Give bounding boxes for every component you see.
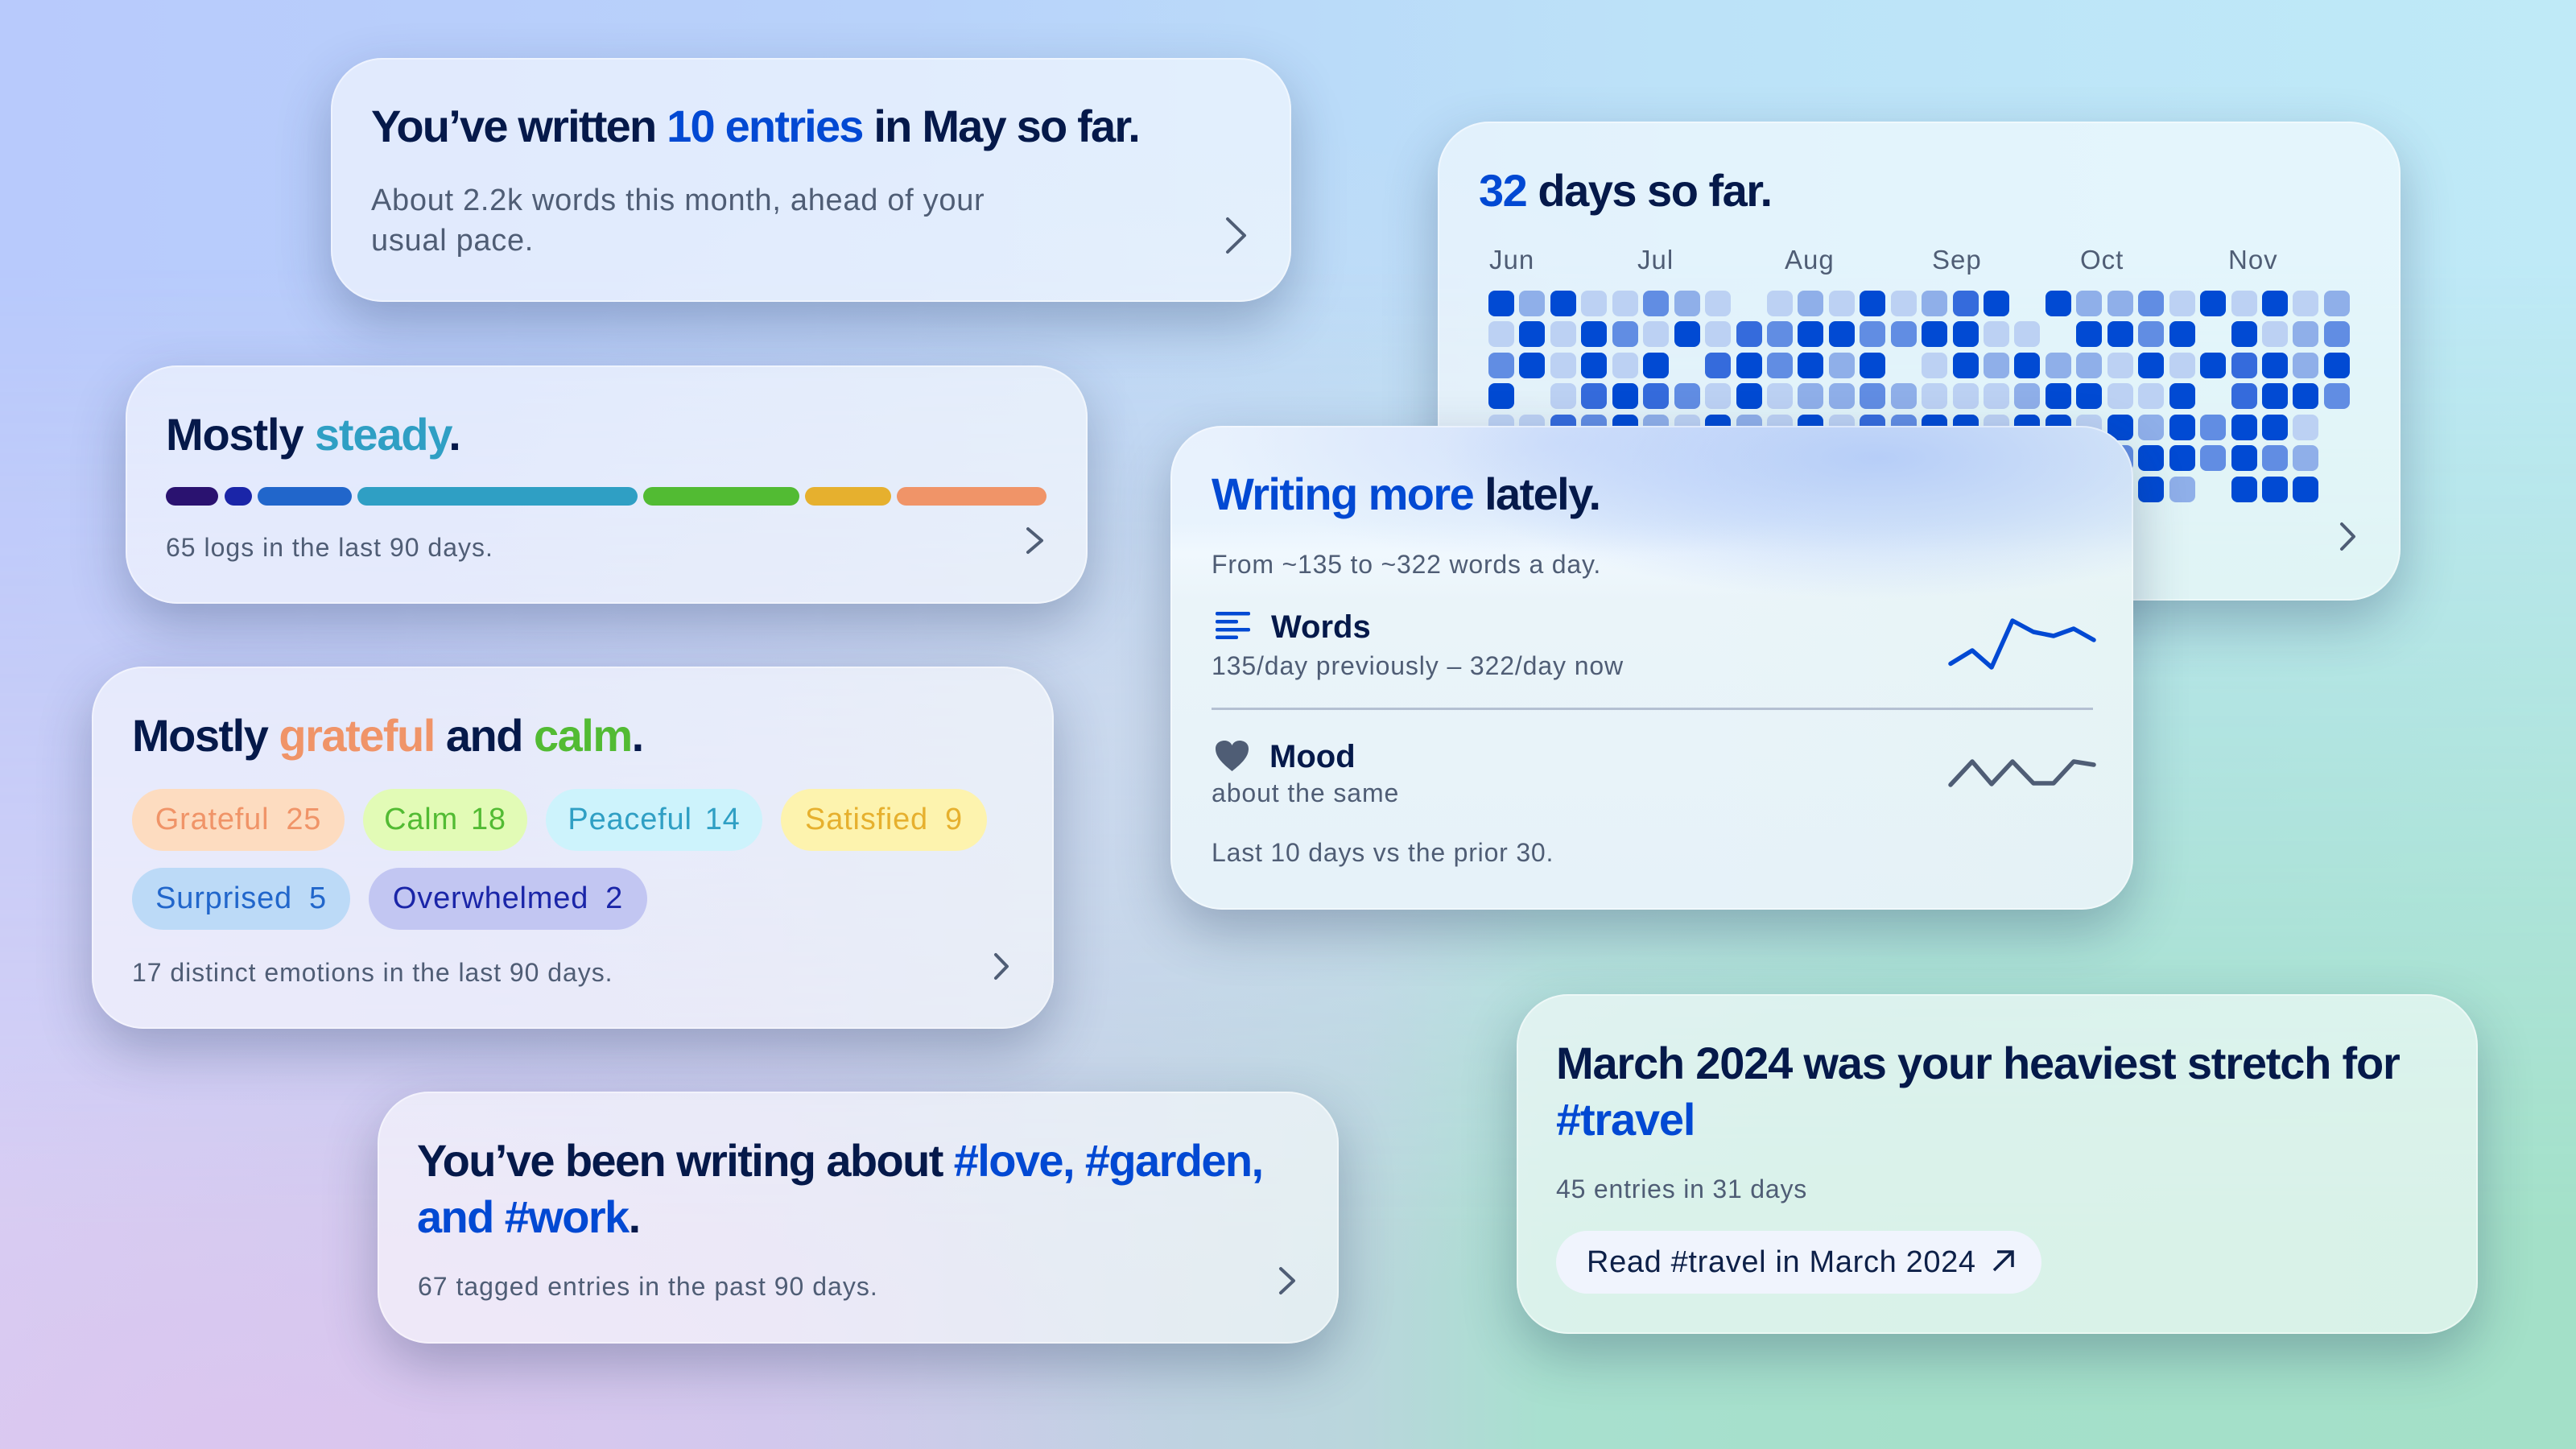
text: words this month xyxy=(371,184,985,258)
divider xyxy=(1212,708,2093,710)
text: words this month: usual pace. xyxy=(371,224,534,258)
pill: Surprised: Surprised xyxy=(155,881,292,915)
pill: Surprised: 5 xyxy=(309,881,327,915)
pill: Satisfied xyxy=(781,789,987,851)
pill: Satisfied: Satisfied xyxy=(805,803,928,836)
month label: Jun: Jun xyxy=(1489,245,1534,275)
heading: heaviest stretch: March 2024 was your heaviest stretch for xyxy=(1556,1038,2400,1088)
heading: emotions: Mostly grateful and calm. xyxy=(132,710,643,761)
pill: Peaceful xyxy=(546,789,762,851)
month label: Nov: Nov xyxy=(2228,245,2278,275)
pill: Overwhelmed xyxy=(369,868,647,930)
sparkline: words xyxy=(1948,618,2096,670)
icon: heart xyxy=(1216,741,1249,771)
heading: tags xyxy=(417,1135,1262,1242)
mood bar xyxy=(166,487,1046,506)
button: read travel xyxy=(1556,1231,2041,1294)
text: distinct emotions: 17 distinct emotions in the last 90 days. xyxy=(132,958,613,987)
heading: heaviest stretch xyxy=(1556,1038,2400,1145)
icon: chevron xyxy=(993,953,1009,980)
panel: tags xyxy=(378,1092,1339,1344)
icon: arrow xyxy=(1993,1250,2014,1272)
panel: Writing more lately xyxy=(1170,426,2133,910)
panel: Mostly grateful and calm xyxy=(92,667,1054,1029)
heading: entries: You’ve written 10 entries in May so far. xyxy=(371,101,1139,151)
text: words a day: From ~135 to ~322 words a day. xyxy=(1212,550,1601,579)
pill: Grateful: Grateful xyxy=(155,803,269,836)
month label: Oct: Oct xyxy=(2080,245,2124,275)
button label: Read #travel in March 2024 xyxy=(1587,1245,1976,1279)
heading: tags: You’ve been writing about #love, #garden, xyxy=(417,1135,1262,1186)
label: Words: Words xyxy=(1271,609,1371,645)
panel: 10 entries in May xyxy=(331,58,1291,302)
icon: chevron xyxy=(1026,526,1043,554)
text: last 10 days: Last 10 days vs the prior 30. xyxy=(1212,838,1554,867)
pill: Overwhelmed: 2 xyxy=(605,881,623,915)
panel: March travel xyxy=(1517,994,2478,1334)
icon: chevron xyxy=(2339,522,2355,551)
icon: chevron xyxy=(1225,217,1246,254)
heading: days so far: 32 days so far. xyxy=(1479,165,1772,216)
month label: Aug: Aug xyxy=(1785,245,1835,275)
pill: Calm: 18 xyxy=(471,803,506,836)
icon: chevron xyxy=(1278,1267,1296,1294)
heading: tags: and #work. xyxy=(417,1191,640,1242)
heading: writing more: Writing more lately. xyxy=(1212,469,1600,519)
text: tagged entries: 67 tagged entries in the past 90 days. xyxy=(418,1272,878,1301)
text: words this month: About 2.2k words this month, ahead of your xyxy=(371,184,985,217)
pill: Grateful xyxy=(132,789,345,851)
pill: Satisfied: 9 xyxy=(945,803,963,836)
month label: Jul: Jul xyxy=(1637,245,1674,275)
pill: Peaceful: 14 xyxy=(705,803,741,836)
pill: Grateful: 25 xyxy=(286,803,321,836)
pill: Peaceful: Peaceful xyxy=(568,803,692,836)
text: logs: 65 logs in the last 90 days. xyxy=(166,533,493,562)
heading: steady: Mostly steady. xyxy=(166,409,460,460)
heading: heaviest stretch: #travel xyxy=(1556,1094,1695,1145)
pill: Overwhelmed: Overwhelmed xyxy=(393,881,588,915)
pill: Calm: Calm xyxy=(384,803,458,836)
heatmap grid xyxy=(1488,291,2350,502)
pill: Surprised xyxy=(132,868,350,930)
sparkline: mood xyxy=(1948,759,2096,787)
pill: Calm xyxy=(363,789,527,851)
text: about the same: about the same xyxy=(1212,778,1399,807)
text: entries in days: 45 entries in 31 days xyxy=(1556,1174,1807,1203)
label: Mood: Mood xyxy=(1269,739,1356,774)
month label: Sep: Sep xyxy=(1932,245,1982,275)
icon: words lines xyxy=(1216,612,1250,639)
panel: Mostly steady xyxy=(126,365,1088,604)
text: words per day: 135/day previously – 322/day now xyxy=(1212,651,1624,680)
panel: 32 days heatmap xyxy=(1438,122,2401,601)
